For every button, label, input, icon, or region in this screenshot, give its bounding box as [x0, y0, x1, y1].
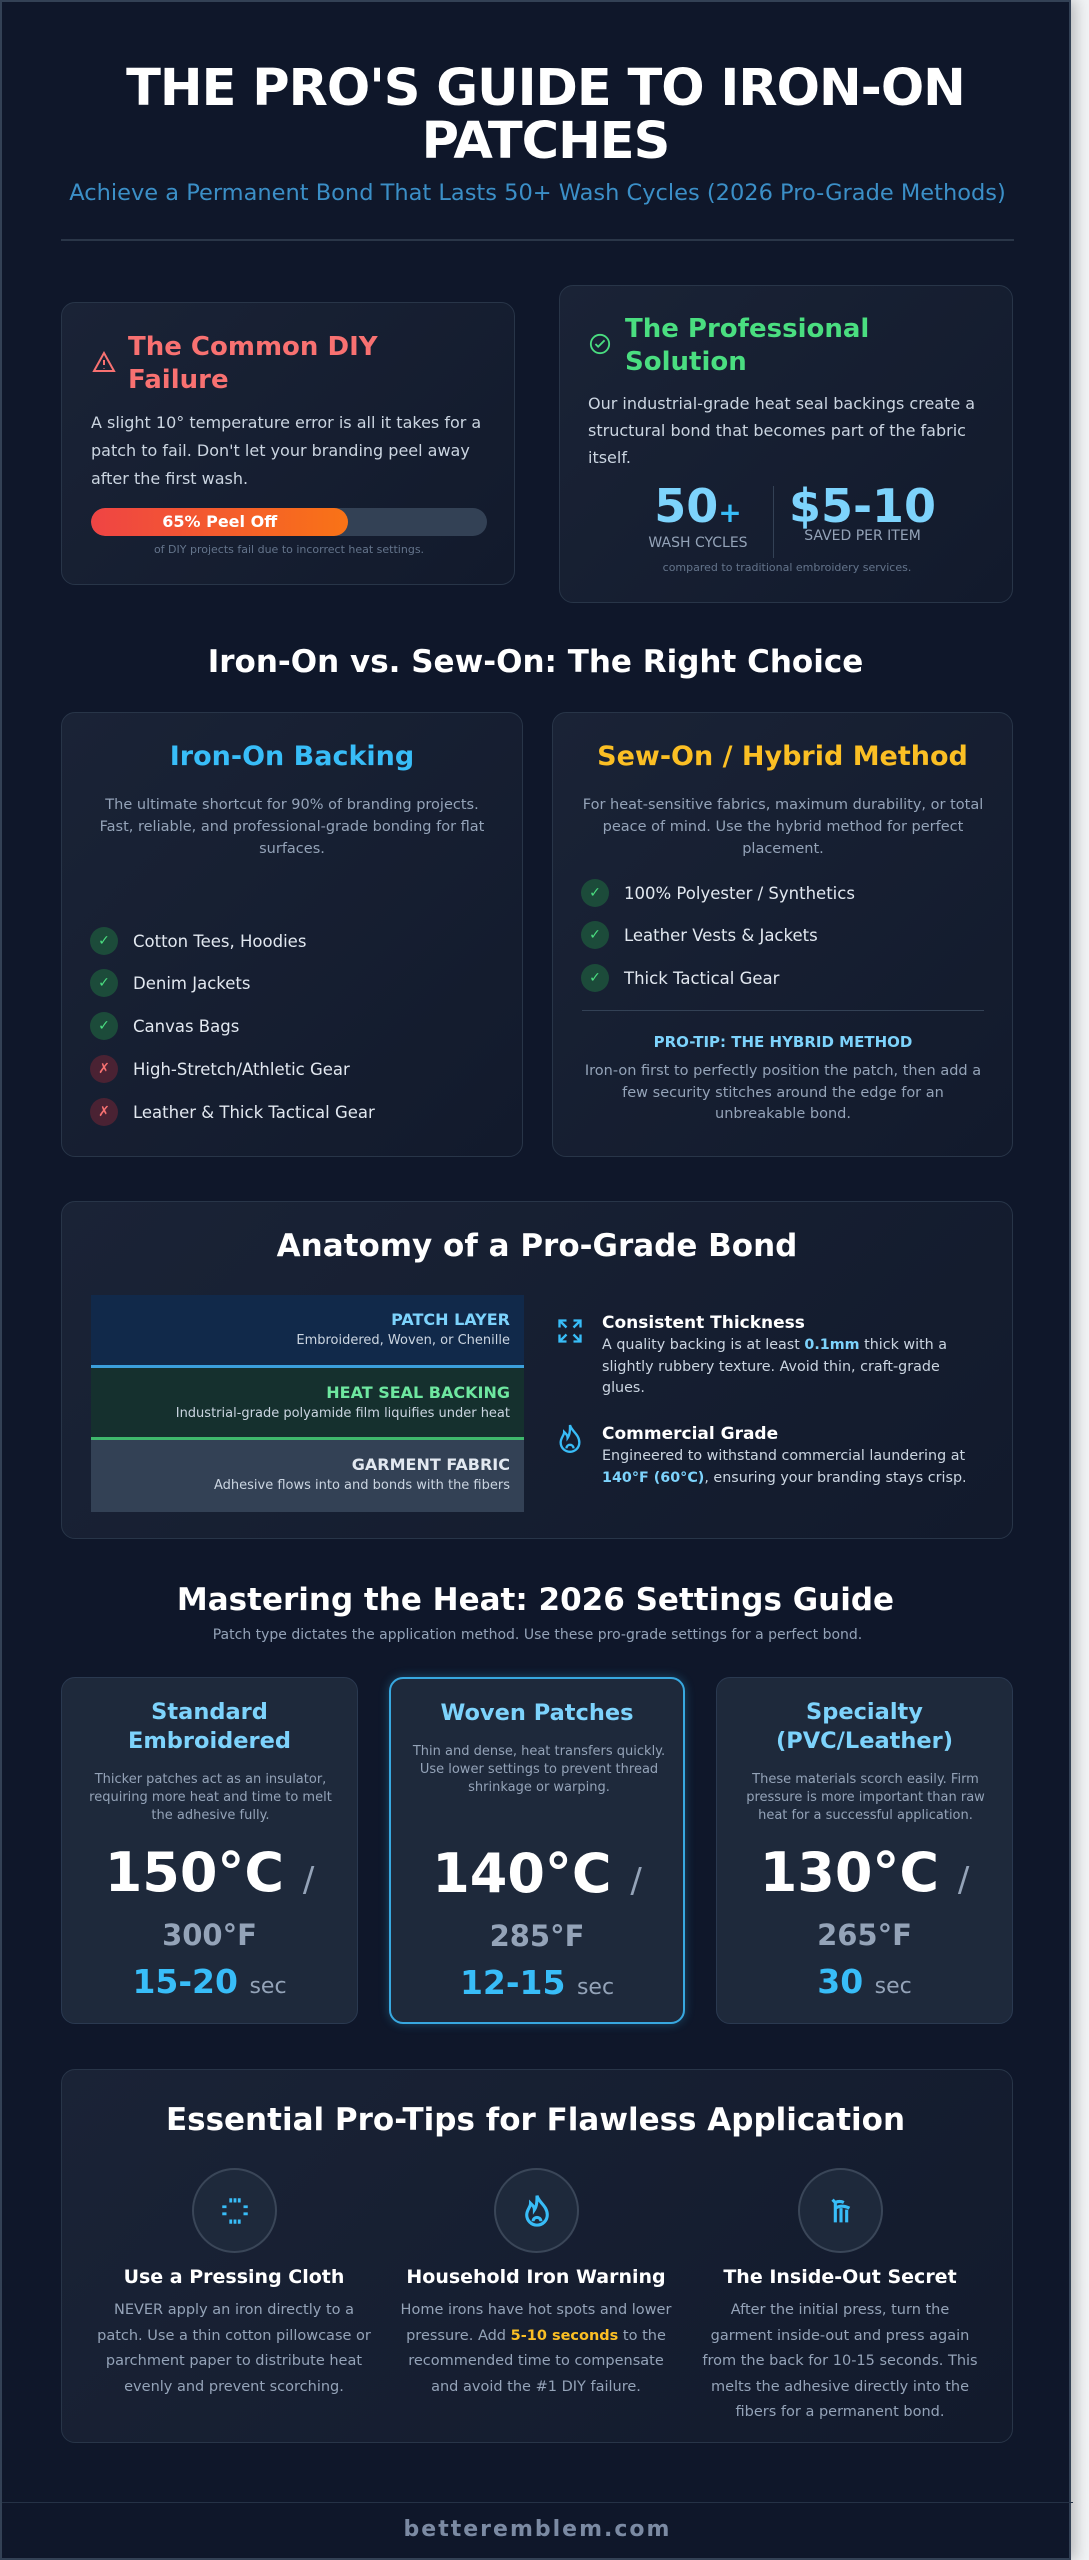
title: THE PRO'S GUIDE TO IRON-ON	[126, 59, 965, 118]
icon: expand	[558, 1319, 582, 1343]
footer: betteremblem.com	[404, 2517, 671, 2542]
diagram: layers: Industrial-grade polyamide film liquifies under heat	[176, 1406, 510, 1421]
panel: specialty: (PVC/Leather)	[776, 1728, 953, 1754]
heading	[625, 314, 869, 377]
diagram: layers: PATCH LAYER	[391, 1310, 510, 1329]
caption: compared to traditional embroidery services.	[663, 561, 911, 574]
panel: specialty	[716, 1677, 1013, 2024]
list: ✓	[589, 885, 601, 901]
callout: pro-tip: PRO-TIP: THE HYBRID METHOD	[654, 1033, 912, 1051]
subtitle: Achieve a Permanent Bond That Lasts 50+ Wash Cycles (2026 Pro-Grade Methods)	[69, 180, 1006, 206]
panel: specialty: These materials scorch easily. Firm pressure is more important than raw heat for a successful application.	[746, 1772, 985, 1823]
list: ✓	[589, 970, 601, 986]
diagram: layers	[91, 1295, 524, 1512]
panel: DIY failure	[61, 302, 515, 585]
stat: wash cycles: 50+	[654, 479, 742, 533]
list: ✓	[98, 933, 110, 949]
text block: commercial grade: Engineered to withstand commercial laundering at 140°F (60°C), ensuring your branding stays crisp.	[602, 1448, 967, 1486]
diagram: layers: GARMENT FABRIC	[352, 1455, 510, 1474]
diagram: layers: Adhesive flows into and bonds with the fibers	[214, 1478, 510, 1493]
panel: standard embroidered: 15-20 sec	[132, 1962, 287, 2001]
list: Cotton Tees, Hoodies	[133, 932, 306, 950]
list: ✓	[98, 975, 110, 991]
list: Leather Vests & Jackets	[624, 926, 818, 944]
list: ✗	[98, 1104, 110, 1120]
list: ✓	[98, 1018, 110, 1034]
panel: specialty: Specialty	[806, 1699, 923, 1725]
caption: of DIY projects fail due to incorrect heat settings.	[154, 543, 424, 556]
panel: standard embroidered: 150°C /	[105, 1841, 314, 1904]
panel: woven patches: 12-15 sec	[460, 1963, 614, 2002]
icon: warning	[92, 351, 116, 372]
list: ✓	[589, 927, 601, 943]
stat: wash cycles: WASH CYCLES	[648, 535, 748, 551]
panel: standard embroidered: 300°F	[162, 1918, 257, 1952]
tip: pressing cloth: Use a Pressing Cloth	[124, 2266, 344, 2288]
panel: woven patches: Thin and dense, heat transfers quickly. Use lower settings to prevent thread shrinkage or warping.	[413, 1744, 665, 1795]
text: NEVER apply an iron directly to a patch. Use a thin cotton pillowcase or parchment paper to distribute heat evenly and prevent scorching.	[97, 2302, 371, 2394]
panel: woven patches: 140°C /	[432, 1842, 642, 1905]
panel: woven patches: 285°F	[490, 1919, 584, 1953]
text: Home irons have hot spots and lower pressure. Add 5-10 seconds to the recommended time to compensate and avoid the #1 DIY failure.	[401, 2302, 671, 2394]
panel: professional solution	[559, 285, 1013, 603]
list: Leather & Thick Tactical Gear	[133, 1102, 375, 1122]
text block: The ultimate shortcut for 90% of branding projects. Fast, reliable, and professional-grade bonding for flat surfaces.	[100, 797, 484, 857]
heading: The Professional	[625, 314, 869, 344]
list: High-Stretch/Athletic Gear	[133, 1060, 350, 1078]
diagram: layers: Embroidered, Woven, or Chenille	[296, 1333, 510, 1348]
panel: anatomy	[61, 1201, 1013, 1539]
text block: For heat-sensitive fabrics, maximum durability, or total peace of mind. Use the hybrid method for perfect placement.	[583, 797, 983, 857]
progress bar	[91, 508, 487, 536]
tip: inside-out: The Inside-Out Secret	[723, 2266, 957, 2288]
list: Denim Jackets	[133, 974, 250, 992]
list: ✗	[98, 1061, 110, 1077]
panel: standard embroidered: Standard	[151, 1699, 268, 1725]
progress bar: 65% Peel Off	[162, 512, 277, 531]
heading: Failure	[128, 365, 229, 395]
heading: Sew-On / Hybrid Method	[597, 741, 968, 772]
list: Canvas Bags	[133, 1016, 239, 1036]
panel: pro tips	[61, 2069, 1013, 2443]
stat: saved: SAVED PER ITEM	[804, 528, 921, 544]
heading: The Common DIY	[128, 332, 378, 362]
callout: pro-tip	[585, 1033, 981, 1122]
list	[90, 927, 375, 1126]
text block: consistent thickness: Consistent Thickness	[602, 1313, 805, 1333]
title	[126, 59, 965, 171]
text block: consistent thickness: A quality backing is at least 0.1mm thick with a slightly rubbery texture. Avoid thin, craft-grade glues.	[602, 1337, 947, 1396]
list: Thick Tactical Gear	[624, 968, 779, 988]
panel: woven patches	[389, 1677, 685, 2024]
text block: commercial grade	[602, 1424, 967, 1486]
diagram: layers: HEAT SEAL BACKING	[326, 1383, 510, 1402]
panel: specialty: 265°F	[817, 1918, 912, 1952]
panel: woven patches: Woven Patches	[440, 1700, 634, 1726]
stat: saved: $5-10	[789, 479, 936, 533]
subtitle: Patch type dictates the application method. Use these pro-grade settings for a perfect bond.	[213, 1627, 862, 1643]
heading: Anatomy of a Pro-Grade Bond	[277, 1228, 797, 1264]
panel: specialty: 30 sec	[817, 1962, 912, 2001]
stat: wash cycles	[648, 479, 748, 551]
tip: household iron: Household Iron Warning	[406, 2266, 666, 2288]
panel: sew-on hybrid	[552, 712, 1013, 1157]
panel: standard embroidered	[61, 1677, 358, 2024]
heading: heat settings: Mastering the Heat: 2026 Settings Guide	[177, 1582, 894, 1618]
heading: iron-on vs sew-on: Iron-On vs. Sew-On: The Right Choice	[208, 644, 863, 680]
panel: specialty: 130°C /	[760, 1841, 969, 1904]
callout: pro-tip: Iron-on first to perfectly position the patch, then add a few security stitches around the edge for an unbreakable bond.	[585, 1063, 981, 1122]
heading: pro tips: Essential Pro-Tips for Flawless Application	[166, 2102, 905, 2138]
text block: commercial grade: Commercial Grade	[602, 1424, 778, 1444]
list: 100% Polyester / Synthetics	[624, 884, 855, 902]
icon: pressing cloth	[192, 2168, 277, 2253]
text block: A slight 10° temperature error is all it takes for a patch to fail. Don't let your branding peel away after the first wash.	[91, 413, 481, 488]
icon: flame	[560, 1424, 580, 1453]
icon: flame	[494, 2168, 579, 2253]
heading	[128, 332, 378, 395]
icon: check circle	[590, 334, 610, 354]
heading: Iron-On Backing	[170, 741, 414, 772]
list	[581, 879, 855, 992]
panel: standard embroidered: Embroidered	[128, 1728, 291, 1754]
panel: standard embroidered: Thicker patches act as an insulator, requiring more heat and time to melt the adhesive fully.	[89, 1772, 332, 1823]
text: After the initial press, turn the garment inside-out and press again from the back for 10-15 seconds. This melts the adhesive directly into the fibers for a permanent bond.	[702, 2302, 978, 2420]
icon: shirt	[798, 2168, 883, 2253]
title: PATCHES	[422, 112, 669, 171]
heading: Solution	[625, 347, 747, 377]
panel: iron-on backing	[61, 712, 523, 1157]
text block: Our industrial-grade heat seal backings create a structural bond that becomes part of the fabric itself.	[588, 394, 975, 467]
